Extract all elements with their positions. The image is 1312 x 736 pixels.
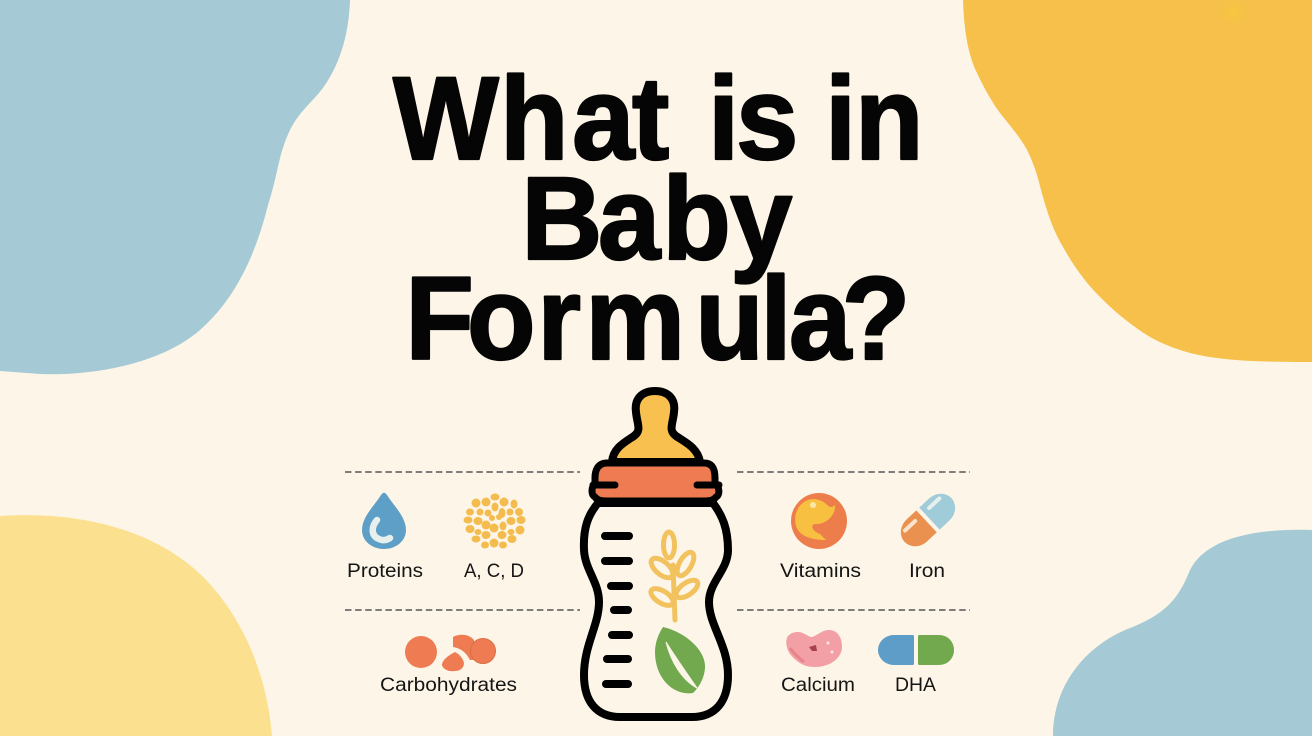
icon: capsule (894, 487, 962, 553)
blob: top left blue (0, 0, 350, 374)
icon: two-tone capsule (878, 635, 954, 665)
label: Carbohydrates (380, 675, 517, 696)
measurement ticks (605, 536, 629, 684)
icon: orange pieces (405, 635, 496, 671)
item: DHA (878, 635, 954, 696)
blob: bottom right blue (1053, 530, 1312, 736)
label: Calcium (781, 675, 855, 696)
label: Vitamins (780, 561, 861, 582)
blob: top right yellow (963, 0, 1312, 362)
icon: orange sphere (791, 493, 847, 549)
title: Formula? (405, 253, 910, 385)
icon: pink bean (786, 630, 842, 667)
title (393, 53, 923, 385)
item: calcium (781, 630, 855, 696)
icon: water drop (362, 493, 406, 549)
item: vitamins (780, 493, 861, 582)
collar notches (593, 482, 719, 488)
label: Iron (909, 561, 945, 582)
green leaf (655, 627, 705, 693)
baby bottle (584, 391, 728, 717)
highlight on yellow blob (1213, 0, 1253, 34)
bottle body (584, 503, 728, 717)
label: A, C, D (464, 561, 524, 582)
dashed divider lines (345, 472, 970, 610)
bottle nipple (612, 391, 700, 462)
icon: dotted circle (464, 494, 526, 548)
title: What is in (393, 53, 923, 185)
label: DHA (895, 675, 936, 696)
item: proteins (347, 493, 423, 582)
title: Baby (521, 153, 792, 285)
blob: bottom left pale yellow (0, 515, 272, 736)
item: iron (894, 487, 962, 582)
item: A, C, D (464, 494, 526, 582)
bottle collar (592, 463, 719, 501)
label: Proteins (347, 561, 423, 582)
wheat sprig (648, 532, 701, 620)
item: carbohydrates (380, 635, 517, 696)
